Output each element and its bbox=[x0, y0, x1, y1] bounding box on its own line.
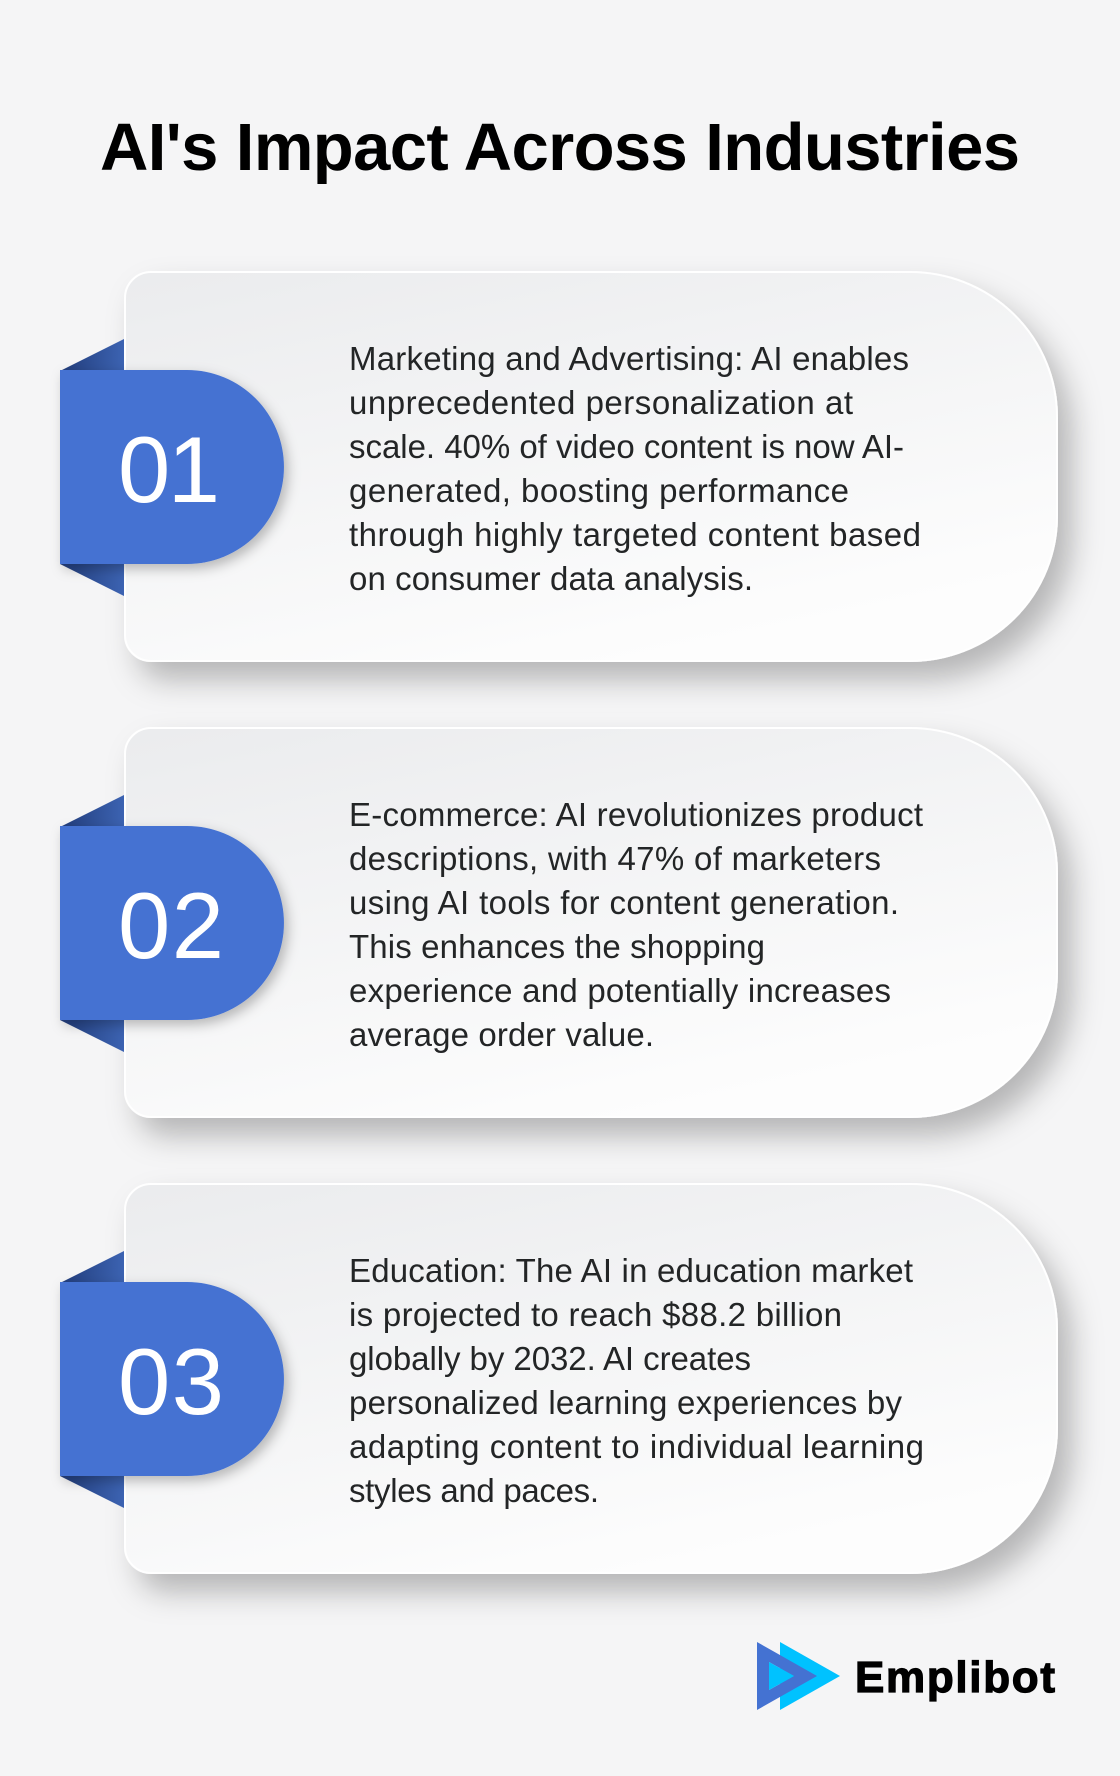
text block: marketing: Marketing and Advertising: AI enables bbox=[349, 340, 909, 377]
text block: marketing: unprecedented personalization at bbox=[349, 384, 853, 421]
text block: e-commerce: descriptions, with 47% of marketers bbox=[349, 840, 881, 877]
icon: ribbon fold bbox=[60, 1251, 124, 1508]
text block: marketing: through highly targeted content based bbox=[349, 516, 921, 553]
text block: education: adapting content to individual learning bbox=[349, 1428, 924, 1465]
number badge 02 bbox=[60, 826, 284, 1020]
text block: education: styles and paces. bbox=[349, 1472, 599, 1509]
text block: education: Education: The AI in education market bbox=[349, 1252, 913, 1289]
text block: marketing: on consumer data analysis. bbox=[349, 560, 753, 597]
text block: marketing: generated, boosting performance bbox=[349, 472, 849, 509]
panel: education bbox=[60, 1184, 1057, 1573]
text block: e-commerce: average order value. bbox=[349, 1016, 654, 1053]
panel: marketing and advertising bbox=[60, 272, 1057, 661]
number badge 03 bbox=[60, 1282, 284, 1476]
text block: e-commerce: using AI tools for content generation. bbox=[349, 884, 899, 921]
number badge 02: 02 bbox=[118, 873, 224, 978]
icon: ribbon fold bbox=[60, 795, 124, 1052]
number badge 01: 01 bbox=[118, 417, 220, 522]
number badge 03: 03 bbox=[118, 1329, 224, 1434]
number badge 01 bbox=[60, 370, 284, 564]
text block: education bbox=[349, 1252, 924, 1509]
text block: marketing: scale. 40% of video content is now AI- bbox=[349, 428, 904, 465]
text block: e-commerce: experience and potentially increases bbox=[349, 972, 891, 1009]
panel: e-commerce bbox=[60, 728, 1057, 1117]
text block: education: is projected to reach $88.2 billion bbox=[349, 1296, 842, 1333]
icon: play triangles bbox=[757, 1642, 840, 1710]
text block: education: personalized learning experiences by bbox=[349, 1384, 902, 1421]
logo: Emplibot bbox=[757, 1642, 1055, 1710]
text block: e-commerce: E-commerce: AI revolutionizes product bbox=[349, 796, 923, 833]
text block: e-commerce: This enhances the shopping bbox=[349, 928, 765, 965]
title: AI's Impact Across Industries bbox=[100, 110, 1020, 185]
icon: ribbon fold bbox=[60, 339, 124, 596]
text block: e-commerce bbox=[349, 796, 923, 1053]
text block: education: globally by 2032. AI creates bbox=[349, 1340, 751, 1377]
logo wordmark: Emplibot bbox=[855, 1653, 1055, 1702]
text block: marketing bbox=[349, 340, 921, 597]
